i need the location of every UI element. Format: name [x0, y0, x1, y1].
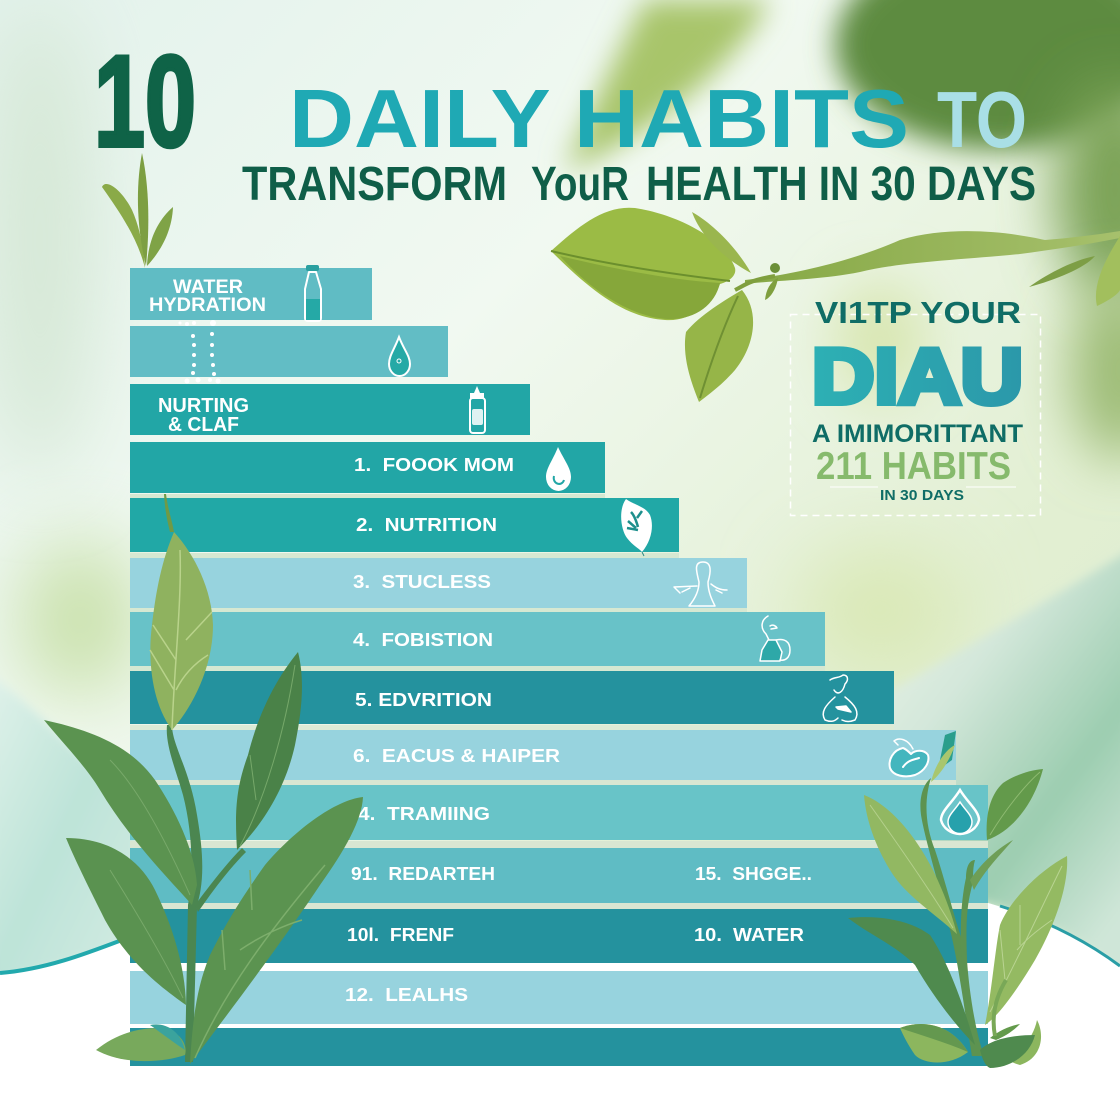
title number: 10 — [94, 28, 196, 174]
stem — [167, 725, 202, 1062]
leaf sprout over bar — [938, 731, 956, 770]
leaf dark — [848, 917, 975, 1045]
top leaf — [150, 532, 213, 730]
icon: drop outline — [389, 337, 410, 376]
icon: water bottle — [305, 265, 321, 321]
mist wave: right — [885, 550, 1120, 980]
icon: figure — [674, 562, 727, 606]
bottom leaf — [96, 1028, 186, 1061]
label: nurting and claf: & CLAF — [168, 414, 239, 436]
icon: person with lungs — [823, 675, 857, 722]
right leaf 1 — [236, 652, 302, 850]
icon: heart apple — [890, 739, 928, 776]
label: nurting and claf — [158, 395, 249, 436]
twig — [745, 231, 1120, 284]
green branch with leaves — [551, 208, 1120, 402]
title line 2: YouR — [531, 158, 629, 211]
large leaf — [551, 208, 735, 320]
callout word art: DIAU — [812, 332, 1023, 420]
icon: white leaf — [621, 499, 652, 556]
label: item 12: 12. LEALHS — [345, 985, 468, 1005]
second stem — [961, 860, 984, 1056]
label: item 10 left: 10l. FRENF — [347, 925, 454, 945]
big leaf — [190, 797, 363, 1064]
label: item 9: 91. REDARTEH — [351, 864, 495, 884]
label: water hydration — [149, 277, 266, 316]
title line 2 — [242, 158, 1036, 211]
label: item 3: 3. STUCLESS — [353, 572, 491, 592]
label: item 7: 4. TRAMIING — [358, 804, 490, 824]
label: item 2: 2. NUTRITION — [356, 515, 497, 535]
bar labels — [149, 277, 812, 1005]
white ground with teal curve — [0, 902, 1120, 1120]
leaf bottom left — [900, 1024, 968, 1063]
dashed frame — [790, 314, 1040, 516]
label: nurting and claf: NURTING — [158, 395, 249, 417]
title line 1: TO — [937, 75, 1027, 164]
callout line 2: A IMIMORITTANT — [812, 420, 1023, 448]
sprout above first bar — [102, 153, 173, 268]
leaf bottom right cluster — [1011, 1020, 1041, 1065]
label: item 15: 15. SHGGE.. — [695, 864, 812, 884]
title line 2: HEALTH IN 30 DAYS — [646, 158, 1036, 211]
title line 1: DAILY HABITS — [289, 72, 909, 165]
stem joint — [735, 276, 775, 290]
label: item 5: 5. EDVRITION — [355, 690, 492, 710]
plant: left foreground — [44, 494, 363, 1064]
stem branch — [970, 840, 1013, 890]
left leaf 2 — [66, 838, 186, 1005]
slim leaf — [692, 212, 751, 273]
icon: large drop — [941, 790, 979, 834]
icon: teapot — [760, 616, 790, 661]
left leaf 1 — [44, 720, 197, 905]
label: water hydration: HYDRATION — [149, 295, 266, 316]
side stem — [195, 848, 246, 912]
label: item 10 right: 10. WATER — [694, 925, 804, 945]
stalk tip — [164, 494, 174, 532]
label: item 4: 4. FOBISTION — [353, 630, 493, 650]
leaf mid right — [985, 856, 1067, 1025]
callout line 1: VI1TP YOUR — [815, 295, 1021, 330]
label: item 6: 6. EACUS & HAIPER — [353, 746, 560, 766]
leaf upper right — [987, 769, 1043, 840]
title line 2: TRANSFORM — [242, 158, 507, 211]
plant: right foreground — [848, 731, 1067, 1068]
callout line 4: IN 30 DAYS — [880, 487, 964, 504]
label: water hydration: WATER — [173, 277, 243, 298]
icon: small bottle — [470, 386, 485, 433]
staircase bars — [130, 268, 988, 1066]
icon: filled drop — [546, 447, 571, 491]
dotted connector — [178, 320, 220, 384]
lower leaf — [685, 290, 753, 402]
blurred separators behind bars — [130, 494, 988, 909]
mist wave: left — [0, 675, 140, 985]
callout: visit your day — [790, 295, 1040, 516]
leaf upper left — [864, 795, 957, 934]
main stem — [920, 778, 978, 1056]
label: item 1: 1. FOOOK MOM — [354, 455, 514, 475]
edge leaf — [1096, 236, 1120, 306]
callout line 3: 211 HABITS — [816, 445, 1011, 488]
